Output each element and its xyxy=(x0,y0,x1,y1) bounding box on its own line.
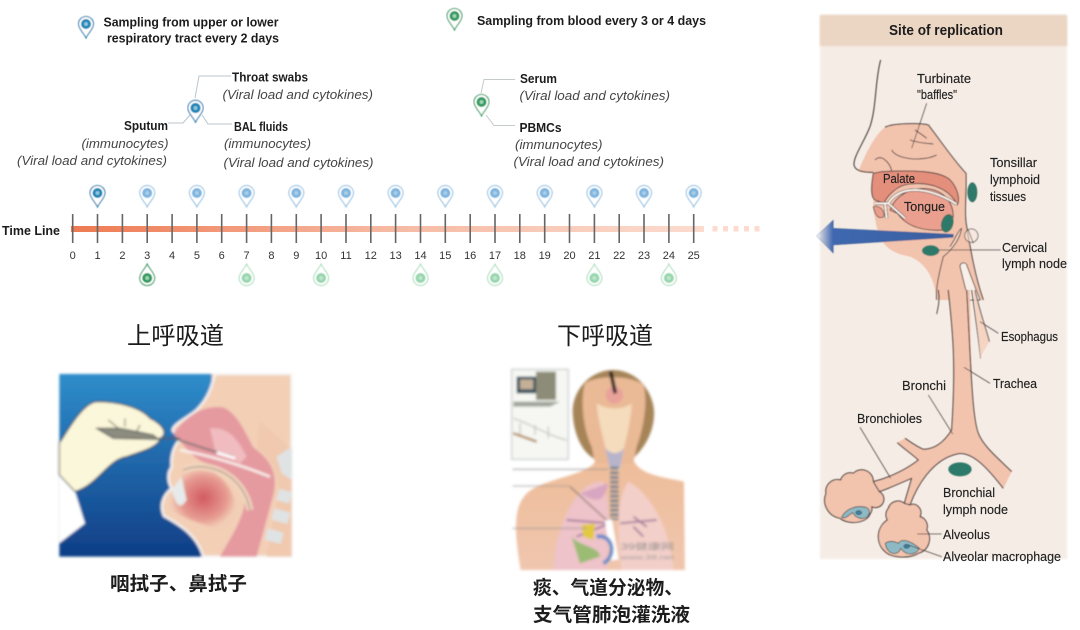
label: throat swabs: (Viral load and cytokines) xyxy=(222,88,373,102)
day numbers: 15 xyxy=(439,250,451,262)
time line chart xyxy=(2,186,760,286)
day numbers: 11 xyxy=(340,250,352,262)
label: PBMCs xyxy=(514,120,664,169)
tick marks xyxy=(73,214,694,243)
legend text: respiratory tract: Sampling from upper or lower xyxy=(104,14,278,30)
day numbers: 18 xyxy=(514,250,526,262)
day numbers: 7 xyxy=(244,250,250,262)
illustration: bronchoscopy sampling xyxy=(512,369,685,570)
caption: lower tract samples xyxy=(533,576,690,626)
anatomy labels: lymph node xyxy=(943,502,1008,517)
timeline bar xyxy=(71,226,760,232)
label: sputum: Sputum xyxy=(124,118,168,133)
icon: green legend pin xyxy=(447,8,462,30)
day numbers: 14 xyxy=(414,250,427,262)
panel: site of replication xyxy=(817,15,1067,564)
day numbers: 22 xyxy=(613,250,625,262)
sample types: respiratory callout xyxy=(17,70,374,170)
legend: upper or lower respiratory sampling xyxy=(78,14,279,46)
label: BAL fluids xyxy=(224,119,374,170)
connector lines xyxy=(481,80,515,126)
label: PBMCs: (Viral load and cytokines) xyxy=(514,155,664,169)
legend text: respiratory tract: respiratory tract every 2 days xyxy=(107,30,279,46)
legend text: respiratory tract xyxy=(104,14,279,46)
anatomy labels: Turbinate xyxy=(917,71,971,86)
day numbers: 19 xyxy=(539,250,551,262)
label: PBMCs: PBMCs xyxy=(520,120,562,135)
label: PBMCs: (immunocytes) xyxy=(515,138,602,152)
anatomy labels: Bronchi xyxy=(902,378,946,393)
anatomy labels: Trachea xyxy=(993,376,1038,391)
legend text: blood: Sampling from blood every 3 or 4 days xyxy=(477,13,706,28)
anatomy labels: Palate xyxy=(883,171,915,186)
day numbers: 25 xyxy=(688,250,700,262)
illustration: nasal swab sampling xyxy=(59,374,292,557)
anatomy: trachea and lungs xyxy=(825,290,1012,557)
day numbers: 17 xyxy=(489,250,501,262)
anatomy labels: tissues xyxy=(990,189,1026,204)
icon: respiratory pin xyxy=(188,100,203,122)
day numbers: 3 xyxy=(144,250,150,262)
day numbers: 5 xyxy=(194,250,200,262)
label: throat swabs: Throat swabs xyxy=(232,70,308,84)
anatomy labels: Bronchial xyxy=(943,485,995,500)
day numbers: 24 xyxy=(663,250,675,262)
caption: lower tract samples: 痰、气道分泌物、 xyxy=(533,576,683,599)
day numbers: 20 xyxy=(563,250,576,262)
heading: upper respiratory tract: 上呼吸道 xyxy=(127,323,224,350)
anatomy labels: lymph node xyxy=(1002,256,1067,271)
icon: blue legend pin xyxy=(78,16,94,38)
label: BAL fluids: BAL fluids xyxy=(234,119,288,134)
day numbers: 2 xyxy=(119,250,125,262)
respiratory sampling pins xyxy=(90,186,701,207)
label: sputum: (Viral load and cytokines) xyxy=(17,154,167,168)
illustration: bronchoscopy sampling: www.39.net xyxy=(619,554,674,561)
legend: blood sampling xyxy=(447,8,706,30)
connector lines xyxy=(168,76,232,124)
day numbers: 9 xyxy=(293,250,299,262)
anatomy: head and throat xyxy=(817,60,1001,300)
anatomy labels: Esophagus xyxy=(1001,329,1058,344)
label: sputum: (immunocytes) xyxy=(82,137,168,151)
day numbers: 21 xyxy=(588,250,601,262)
sample types: blood callout xyxy=(474,71,670,169)
label: serum xyxy=(520,71,670,103)
day numbers: 13 xyxy=(389,250,402,262)
day numbers: 4 xyxy=(169,250,175,262)
label: serum: (Viral load and cytokines) xyxy=(520,89,670,103)
panel header band xyxy=(820,15,1067,46)
anatomy labels: Cervical xyxy=(1002,240,1047,255)
day numbers: 0 xyxy=(70,250,76,262)
day numbers: 6 xyxy=(219,250,225,262)
anatomy labels: Tongue xyxy=(904,199,945,214)
anatomy labels: Alveolus xyxy=(943,527,990,542)
day numbers xyxy=(70,250,700,262)
label: BAL fluids: (immunocytes) xyxy=(224,137,311,151)
day numbers: 8 xyxy=(268,250,274,262)
label: BAL fluids: (Viral load and cytokines) xyxy=(224,156,374,170)
anatomy labels: Bronchioles xyxy=(857,411,922,426)
label: serum: Serum xyxy=(520,71,557,86)
day numbers: 12 xyxy=(365,250,377,262)
caption: lower tract samples: 支气管肺泡灌洗液 xyxy=(533,603,690,626)
time line label: Time Line xyxy=(2,223,60,238)
day numbers: 10 xyxy=(315,250,327,262)
label: throat swabs xyxy=(222,70,373,102)
anatomy labels: Tonsillar xyxy=(990,155,1038,170)
day numbers: 1 xyxy=(94,250,101,262)
anatomy labels: lymphoid xyxy=(990,172,1040,187)
caption: upper tract samples: 咽拭子、鼻拭子 xyxy=(110,572,247,595)
illustration: bronchoscopy sampling: 39健康网 xyxy=(621,540,674,551)
heading: lower respiratory tract: 下呼吸道 xyxy=(557,323,653,350)
anatomy labels: Alveolar macrophage xyxy=(943,549,1061,564)
panel header band: Site of replication xyxy=(889,23,1003,39)
panel background xyxy=(820,15,1067,559)
icon: blood pin xyxy=(474,94,489,116)
anatomy labels xyxy=(857,71,1067,564)
label: sputum xyxy=(17,118,168,168)
anatomy labels: "baffles" xyxy=(917,87,957,102)
day numbers: 16 xyxy=(464,250,476,262)
day numbers: 23 xyxy=(638,250,650,262)
blood sampling pins xyxy=(140,264,676,286)
